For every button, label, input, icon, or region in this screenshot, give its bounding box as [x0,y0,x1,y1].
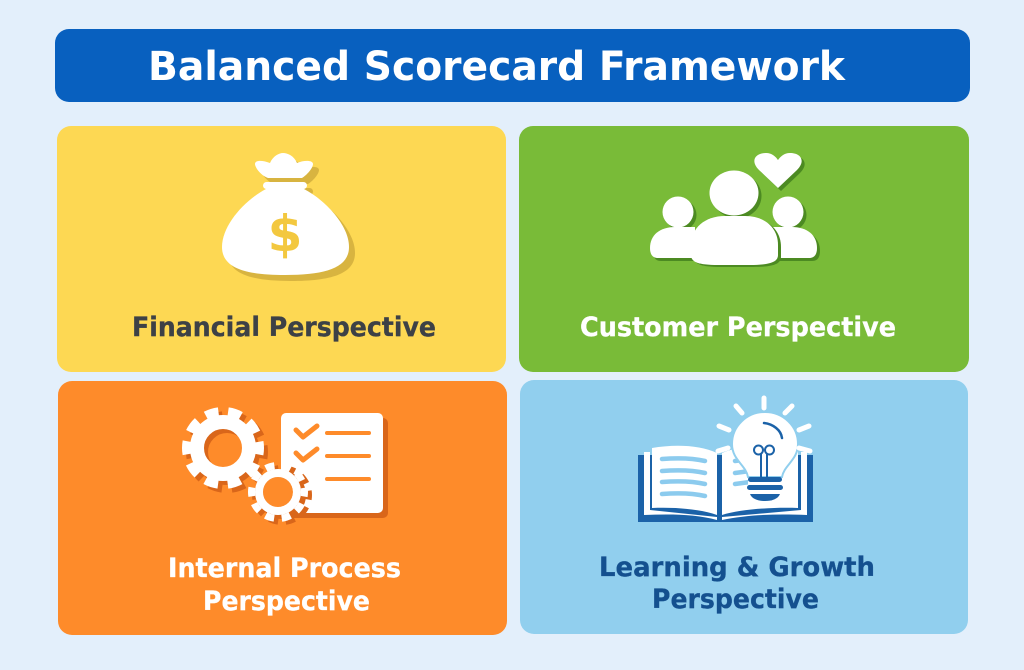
title: Balanced Scorecard Framework [148,44,846,90]
panel: internal process perspective [58,381,507,635]
icon: money bag [222,153,355,281]
label: internal process perspective: Internal Process [168,553,401,584]
panel: customer perspective [519,126,969,372]
icon: open book [638,446,813,522]
icon: checklist [281,413,388,518]
panel: financial perspective [57,126,506,372]
icon: customers with heart [650,153,820,267]
dollar sign: $ [268,205,302,263]
icon: heart [754,153,802,188]
label: learning and growth perspective: Learning & Growth [599,552,875,583]
title banner [55,29,970,102]
icon: light bulb [718,398,810,503]
label: customer perspective: Customer Perspective [580,312,896,343]
label: internal process perspective: Perspective [203,586,370,617]
label: learning and growth perspective [599,552,875,615]
icon: gears [187,412,308,522]
panel: learning and growth perspective [520,380,968,634]
label: learning and growth perspective: Perspective [652,584,819,615]
icon: light rays [718,398,810,451]
label: internal process perspective [168,553,401,617]
label: financial perspective: Financial Perspective [132,312,436,343]
